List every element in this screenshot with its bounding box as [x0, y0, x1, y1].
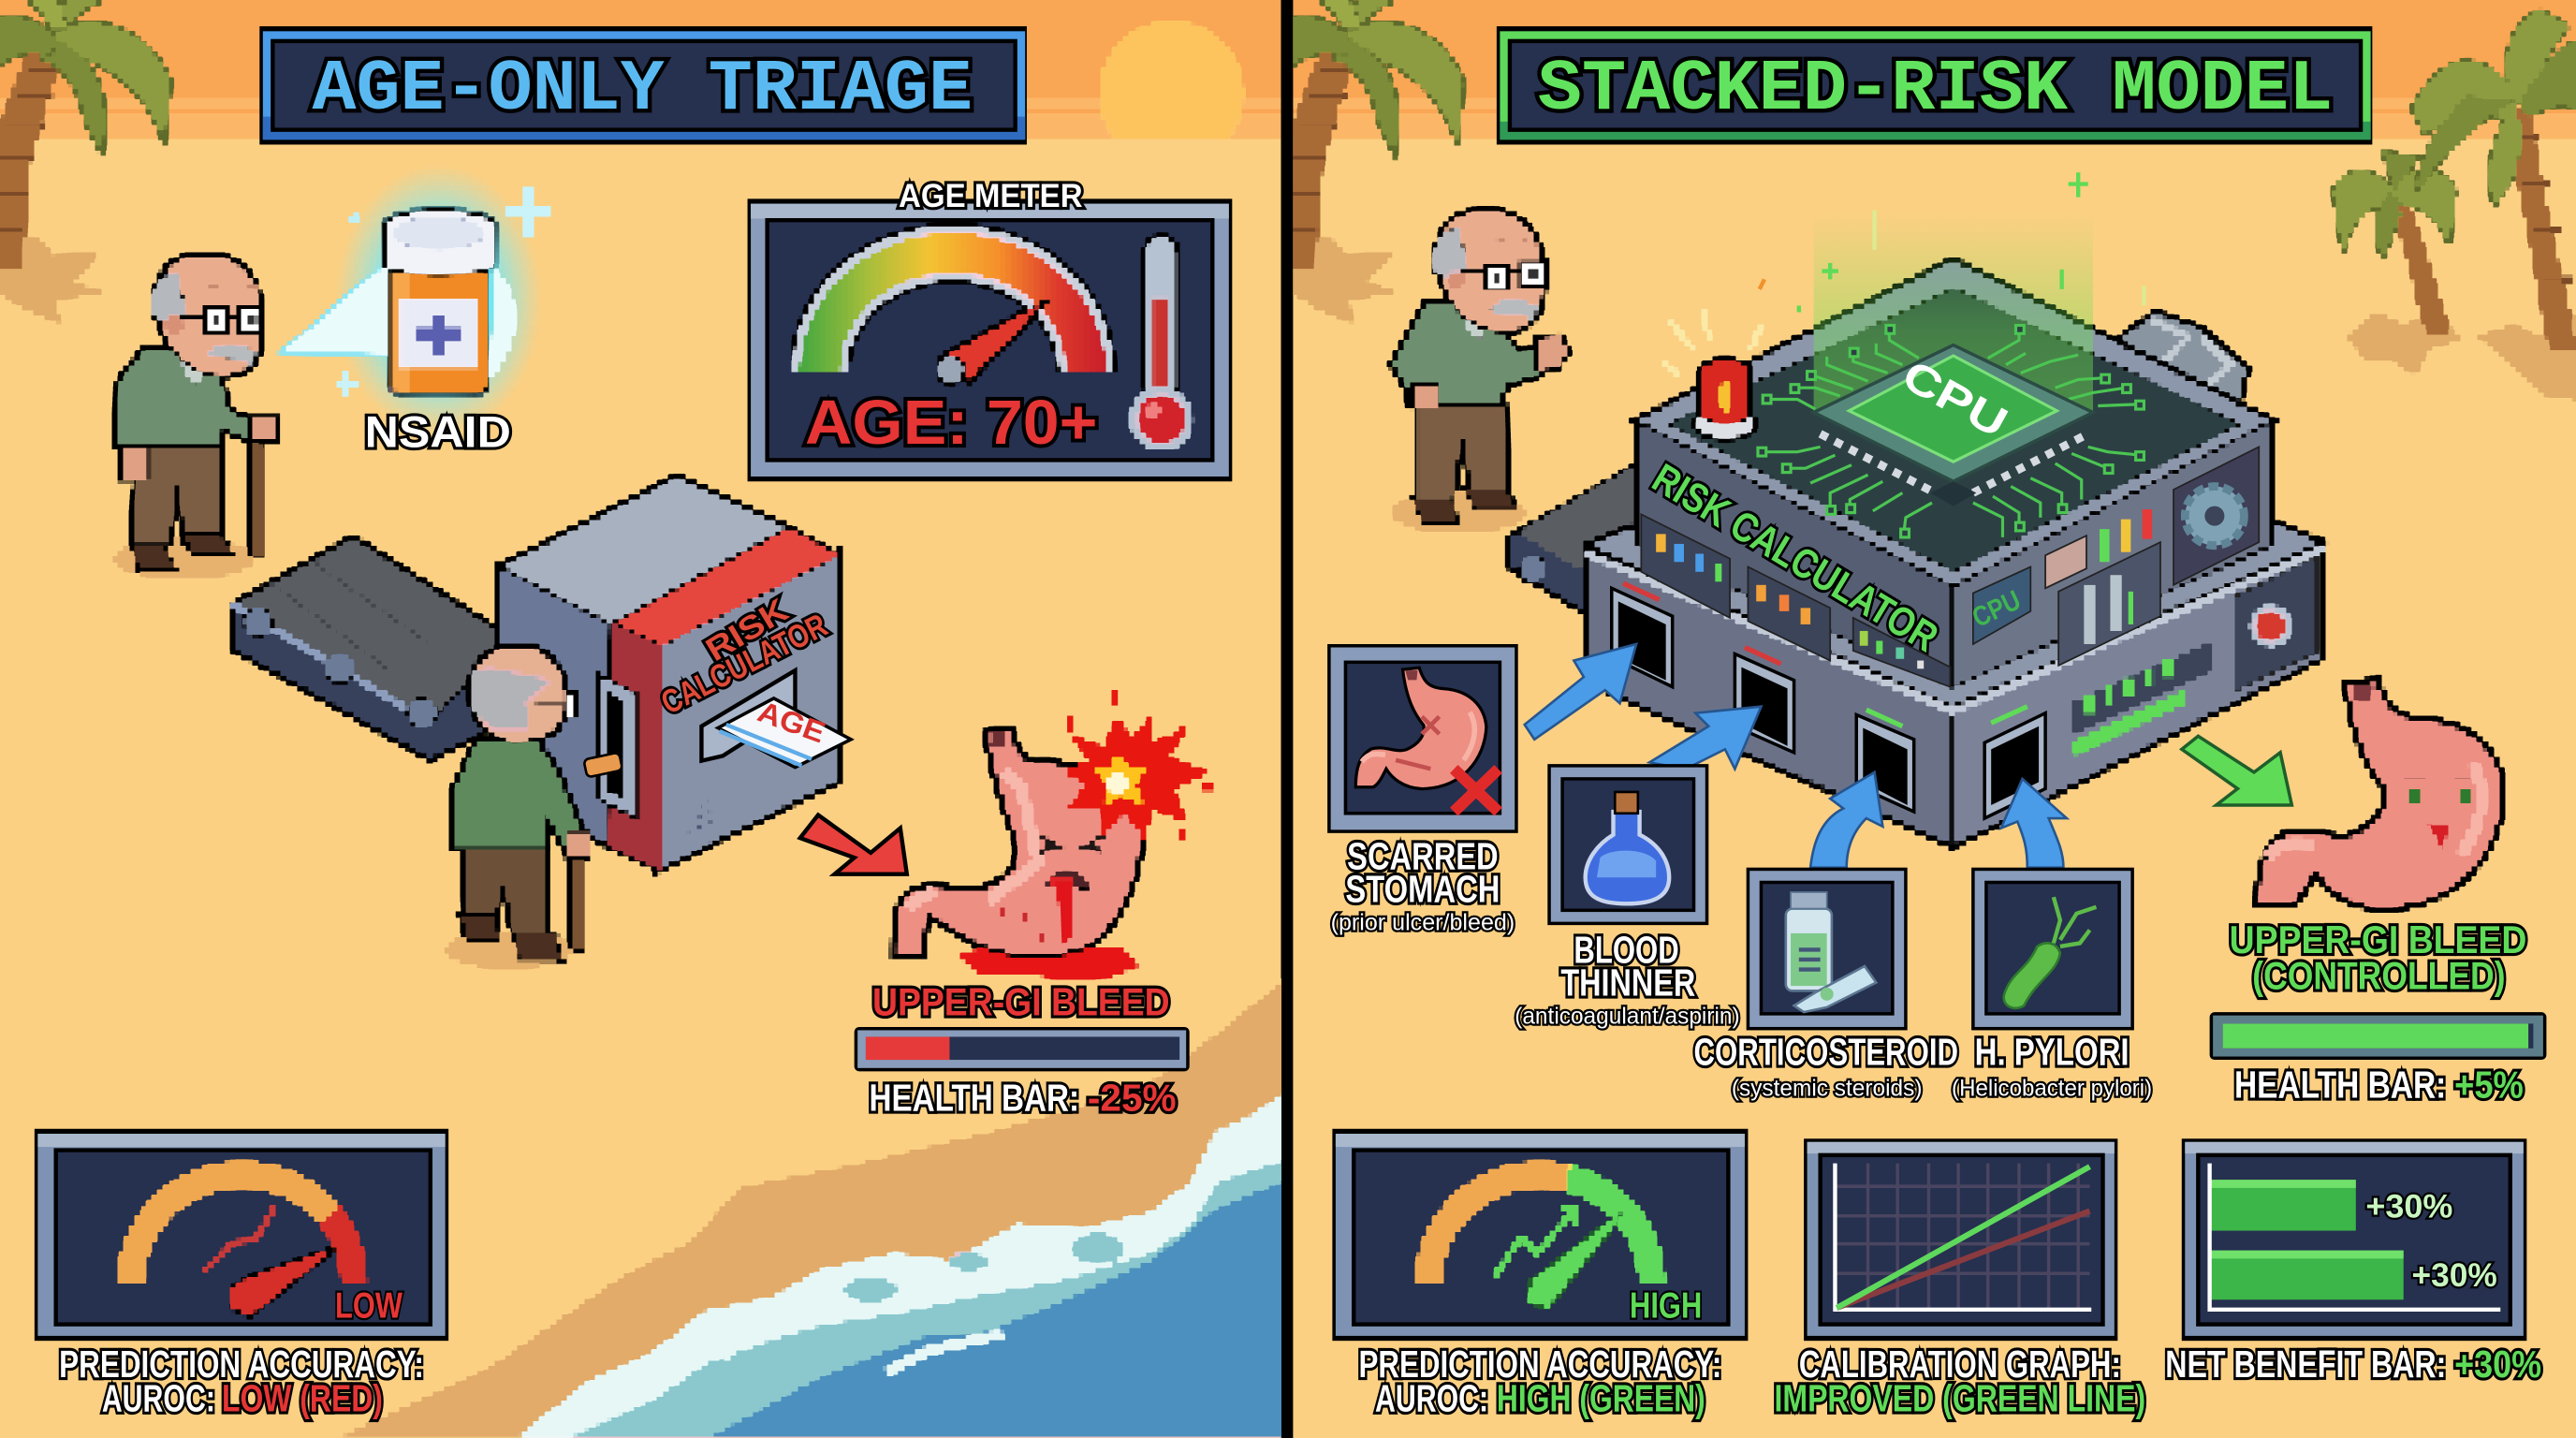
label: upper-GI bleed controlled: [2230, 917, 2526, 998]
icon: thermometer: [1134, 237, 1190, 447]
label: upper-GI bleed controlled: (CONTROLLED): [2252, 954, 2506, 998]
title: Stacked-Risk Model: STACKED-RISK MODEL: [1538, 50, 2333, 131]
icon: scarred stomach: [1355, 668, 1486, 789]
caption: prediction accuracy low: LOW (RED): [222, 1377, 383, 1420]
title: Age-Only Triage: AGE-ONLY TRIAGE: [312, 50, 973, 131]
caption: net benefit: +30%: [2454, 1343, 2541, 1386]
gauge: age dial: [820, 253, 1086, 383]
card: H. pylori: [1971, 868, 2134, 1030]
palm tree: big right: [2411, 10, 2576, 399]
panel: net benefit bars: [2182, 1138, 2526, 1341]
label: corticosteroid: [1694, 1030, 1958, 1102]
panel: prediction accuracy low: [35, 1129, 448, 1341]
icon: bacterium: [2004, 897, 2097, 1008]
panel: calibration graph: [1804, 1138, 2117, 1341]
caption: net benefit: NET BENEFIT BAR:: [2165, 1343, 2446, 1386]
sparks above CPU: [1760, 172, 2144, 312]
background: left beach panel: [0, 0, 1288, 1438]
icon: blue flask: [1586, 792, 1669, 903]
label: blood thinner: (anticoagulant/aspirin): [1515, 1004, 1740, 1029]
card: age slot: AGE: [754, 694, 830, 750]
label: blood thinner: BLOOD: [1573, 928, 1679, 971]
panel: age meter: [748, 178, 1232, 481]
palm tree: right panel left: [1280, 0, 1464, 322]
icon: NSAID pill bottle with glow: [283, 166, 552, 435]
label: scarred stomach: STOMACH: [1345, 868, 1500, 911]
center divider: [1281, 0, 1293, 1438]
caption: prediction accuracy low: PREDICTION ACCURACY:: [59, 1343, 424, 1386]
label: H. pylori: H. PYLORI: [1975, 1030, 2130, 1073]
palm tree: small right: [2333, 151, 2461, 374]
label: low: LOW: [335, 1286, 402, 1327]
icon: vial and syringe: [1786, 892, 1876, 1012]
palm tree: left panel: [0, 0, 171, 322]
circuit traces: [1758, 326, 2144, 537]
machine body: [500, 477, 840, 871]
character: patient entering machine, back view: [446, 646, 590, 968]
machine: risk calculator (simple): [500, 477, 851, 871]
text: health bar -25%: -25%: [1088, 1076, 1177, 1119]
caption: prediction accuracy high: PREDICTION ACCURACY:: [1358, 1343, 1721, 1386]
icon: red x: [1454, 769, 1499, 812]
card: corticosteroid: [1747, 868, 1908, 1030]
label: risk calculator green: RISK CALCULATOR: [1645, 455, 1946, 661]
title: Stacked-Risk Model: [1497, 26, 2372, 144]
chart: net benefit bars: +30%: [2365, 1189, 2452, 1225]
label: upper-GI bleed controlled: UPPER-GI BLEED: [2230, 917, 2526, 961]
caption: calibration graph: IMPROVED (GREEN LINE): [1775, 1377, 2145, 1420]
label: age meter: AGE METER: [899, 178, 1083, 214]
label: upper-GI bleed: UPPER-GI BLEED: [872, 980, 1170, 1024]
caption: prediction accuracy low: AUROC:: [102, 1377, 215, 1420]
character: elderly patient with cane: [115, 255, 276, 579]
machine: risk calculator (stacked): [1587, 213, 2323, 846]
chart: net benefit bars: [2210, 1164, 2500, 1310]
icon: red alarm light: [1662, 309, 1761, 439]
caption: calibration graph: [1775, 1343, 2145, 1420]
arrow: red to stomach: [800, 815, 907, 874]
label: H. pylori: (Helicobacter pylori): [1952, 1077, 2152, 1102]
panel: prediction accuracy high: [1332, 1129, 1748, 1341]
CPU chip: CPU: [1895, 351, 2015, 447]
text: age 70+: AGE: 70+: [805, 389, 1097, 458]
label: blood thinner: [1515, 928, 1740, 1029]
label: blood thinner: THINNER: [1560, 961, 1695, 1005]
chart: net benefit bars: +30%: [2411, 1257, 2497, 1294]
port: input 2: [1734, 648, 1794, 753]
label: corticosteroid: CORTICOSTEROID: [1694, 1030, 1958, 1073]
CPU chip: [1814, 345, 2093, 506]
health bar: low: [855, 1027, 1190, 1071]
label: scarred stomach: SCARRED: [1347, 834, 1499, 877]
green beam: [1814, 213, 2093, 479]
machine body: [1587, 259, 2323, 846]
control lights: left face: [1641, 514, 1950, 687]
port: input 4: [1984, 707, 2045, 818]
port: input 1: [1612, 583, 1673, 687]
label: scarred stomach: [1331, 834, 1515, 935]
caption: prediction accuracy high: AUROC:: [1375, 1377, 1488, 1420]
arrow: input 3: [1810, 772, 1882, 868]
icon: bleeding stomach: [894, 690, 1212, 979]
panel: dial and switches lower right: [2073, 559, 2317, 749]
caption: prediction accuracy high: HIGH (GREEN): [1497, 1377, 1705, 1420]
caption: prediction accuracy low: [59, 1343, 424, 1420]
conveyor belt: left: [233, 537, 501, 759]
control panels: right face: [1856, 447, 2259, 726]
chart: calibration lines: [1835, 1164, 2091, 1310]
card: age slot: [701, 670, 851, 768]
label: NSAID: NSAID: [365, 407, 511, 457]
port: input 3: [1856, 710, 1914, 812]
text: health bar -25%: HEALTH BAR:: [869, 1076, 1079, 1119]
gear cylinder behind machine: [2111, 312, 2247, 411]
caption: calibration graph: CALIBRATION GRAPH:: [1799, 1343, 2121, 1386]
card: blood thinner: [1547, 764, 1708, 925]
card: scarred stomach: [1327, 644, 1518, 833]
icon: pill in hand: [583, 753, 622, 777]
text: health bar +5%: +5%: [2454, 1063, 2524, 1106]
gauge: high accuracy: [1428, 1175, 1652, 1308]
caption: prediction accuracy high: [1358, 1343, 1721, 1420]
arrow: green to stomach: [2182, 736, 2291, 805]
label: high: HIGH: [1630, 1286, 1702, 1327]
arrow: input 4: [2001, 779, 2067, 868]
label: corticosteroid: (systemic steroids): [1732, 1077, 1922, 1102]
label: H. pylori: [1952, 1030, 2152, 1102]
character: elderly patient, stacked model: [1392, 211, 1569, 533]
health bar: high: [2210, 1012, 2546, 1060]
label: risk calculator: CALCULATOR: [655, 607, 833, 722]
text: health bar +5%: HEALTH BAR:: [2234, 1063, 2446, 1106]
arrow: input 2: [1649, 707, 1761, 769]
gauge: low accuracy: [131, 1175, 354, 1316]
label: risk calculator: RISK: [700, 592, 795, 668]
control panels: right face: CPU: [1968, 585, 2026, 634]
conveyor belt: right: [1510, 468, 1633, 611]
background: right beach panel: [1293, 0, 2576, 1438]
label: scarred stomach: (prior ulcer/bleed): [1331, 910, 1515, 935]
title: Age-Only Triage: [259, 26, 1027, 144]
icon: healthy stomach: [2258, 681, 2504, 909]
arrow: input 1: [1525, 644, 1636, 740]
